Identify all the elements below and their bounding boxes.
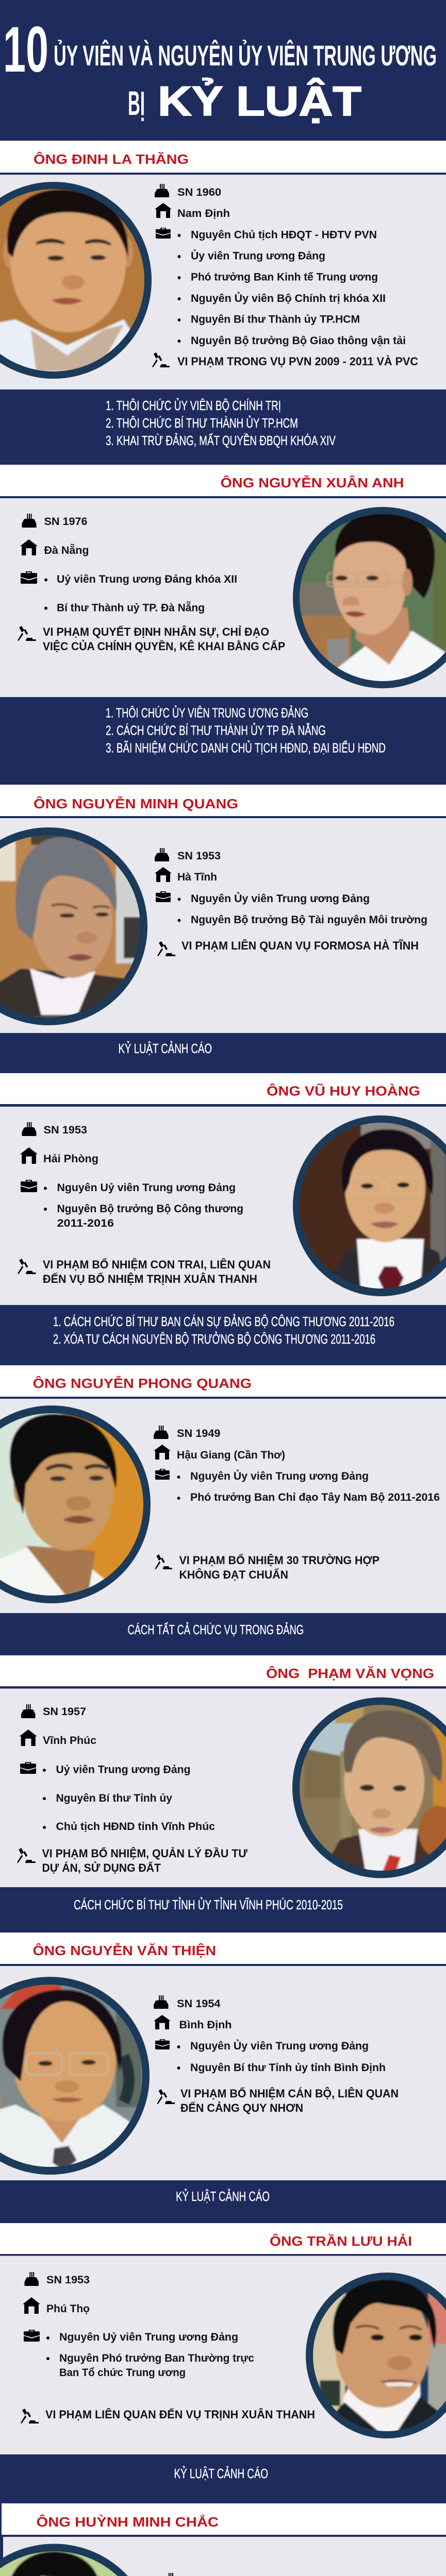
position list: Nguyên Bộ trưởng Bộ Tài nguyên Môi trường <box>191 914 427 926</box>
violation: VI PHẠM LIÊN QUAN VỤ FORMOSA HÀ TĨNH <box>181 939 419 952</box>
position list: Ban Tổ chức Trung ương <box>59 2367 186 2379</box>
hometown: Đà Nẵng <box>44 544 89 556</box>
position list: Nguyên Ủy viên Bộ Chính trị khóa XII <box>191 292 386 304</box>
position list: Uỷ viên Trung ương Đảng <box>56 1764 191 1775</box>
panel: Nguyễn Xuân Anh <box>0 465 446 785</box>
position list: Nguyên Uỷ viên Trung ương Đảng <box>59 2331 238 2343</box>
portrait <box>292 1697 446 1878</box>
position list: Nguyên Ủy viên Trung ương Đảng <box>190 1470 369 1482</box>
portrait <box>0 1977 150 2175</box>
icon: birthday cake <box>154 1995 168 2009</box>
position list: Phó trưởng Ban Chỉ đạo Tây Nam Bộ 2011-2016 <box>190 1492 440 1503</box>
violation <box>179 1554 379 1581</box>
title word BỊ: BỊ <box>128 84 145 122</box>
icon: gavel <box>18 626 36 641</box>
icon: gavel <box>155 1554 172 1569</box>
icon: gavel <box>18 1259 36 1274</box>
portrait <box>293 1115 446 1296</box>
discipline bar <box>0 1887 446 1933</box>
icon: birthday cake <box>21 1704 35 1718</box>
violation: DỰ ÁN, SỬ DỤNG ĐẤT <box>42 1861 161 1874</box>
discipline bar <box>0 1305 446 1365</box>
portrait <box>0 2544 128 2576</box>
icon: house <box>23 2297 40 2314</box>
icon: birthday cake <box>155 848 169 861</box>
position list: Bí thư Thành uỷ TP. Đà Nẵng <box>57 602 205 614</box>
panel: Huỳnh Minh Chắc <box>0 2503 446 2576</box>
icon: briefcase <box>21 1180 37 1192</box>
icon: birthday cake <box>22 1122 36 1136</box>
violation <box>42 1847 247 1874</box>
position list: Nguyên Chủ tịch HĐQT - HĐTV PVN <box>191 229 377 241</box>
icon: briefcase <box>24 2330 40 2342</box>
icon: house <box>154 2015 171 2029</box>
portrait <box>0 1405 151 1603</box>
position list: Phó trưởng Ban Kinh tế Trung ương <box>191 271 378 283</box>
icon: house <box>20 1730 37 1746</box>
panel: Phạm Văn Vọng <box>0 1655 446 1933</box>
portrait <box>0 827 147 1025</box>
position list <box>44 573 237 614</box>
position list: Nguyên Bộ trưởng Bộ Giao thông vận tải <box>191 335 406 347</box>
icon: birthday cake <box>25 2272 39 2286</box>
position list <box>177 2040 386 2074</box>
name heading: ÔNG ĐINH LA THĂNG <box>34 151 189 167</box>
discipline bar <box>0 697 446 785</box>
violation: KHÔNG ĐẠT CHUẨN <box>179 1568 288 1581</box>
position list <box>177 892 427 926</box>
birth year: SN 1953 <box>46 2274 90 2286</box>
panel: Nguyễn Minh Quang <box>0 785 446 1073</box>
header banner <box>0 0 446 141</box>
panel: Nguyễn Phong Quang <box>0 1365 446 1655</box>
panel: Đinh La Thăng <box>0 141 446 465</box>
position list: Uỷ viên Trung ương Đảng khóa XII <box>57 573 237 585</box>
birth year: SN 1976 <box>44 516 88 528</box>
icon: briefcase <box>20 1762 36 1774</box>
discipline bar <box>0 2180 446 2223</box>
name heading: ÔNG PHẠM VĂN VỌNG <box>266 1666 434 1681</box>
violation: VI PHẠM BỔ NHIỆM 30 TRƯỜNG HỢP <box>179 1554 379 1567</box>
position list: Nguyên Ủy viên Trung ương Đảng <box>190 2040 369 2052</box>
violation: ĐẾN CẢNG QUY NHƠN <box>180 2102 303 2114</box>
birth year: SN 1949 <box>177 1428 221 1439</box>
icon: briefcase <box>155 2039 170 2049</box>
icon: gavel <box>157 2089 175 2104</box>
discipline bar: 2. CÁCH CHỨC BÍ THƯ THÀNH ỦY TP ĐÀ NẴNG <box>106 722 326 738</box>
icon: briefcase <box>21 571 37 584</box>
title emphasis KỶ LUẬT: KỶ LUẬT <box>158 77 361 125</box>
discipline bar <box>0 1613 446 1655</box>
icon: house <box>155 867 172 882</box>
violation <box>43 625 285 653</box>
hometown: Hậu Giang (Cần Thơ) <box>177 1449 285 1461</box>
position list <box>43 1764 215 1833</box>
position list: Nguyên Uỷ viên Trung ương Đảng <box>57 1182 236 1194</box>
hometown: Hải Phòng <box>43 1153 98 1165</box>
position list: Chủ tịch HĐND tỉnh Vĩnh Phúc <box>56 1821 215 1833</box>
name heading: ÔNG NGUYỄN XUÂN ANH <box>221 475 404 490</box>
icon: briefcase <box>156 228 171 239</box>
violation: ĐẾN VỤ BỔ NHIỆM TRỊNH XUÂN THANH <box>43 1273 257 1285</box>
violation: VI PHẠM BỔ NHIỆM CON TRAI, LIÊN QUAN <box>43 1258 271 1271</box>
violation: VIỆC CỦA CHÍNH QUYỀN, KÊ KHAI BẰNG CẤP <box>43 640 285 653</box>
discipline bar: KỶ LUẬT CẢNH CÁO <box>119 1041 212 1056</box>
violation <box>43 1258 271 1285</box>
position list: Nguyên Ủy viên Trung ương Đảng <box>191 892 370 905</box>
position list: 2011-2016 <box>57 1217 114 1229</box>
icon: gavel <box>17 1848 35 1863</box>
hometown: Vĩnh Phúc <box>43 1735 96 1747</box>
position list <box>46 2331 254 2379</box>
discipline bar <box>0 1033 446 1073</box>
position list: Nguyên Bí thư Tỉnh ủy <box>56 1792 172 1804</box>
discipline bar <box>0 389 446 465</box>
hometown: Phú Thọ <box>46 2303 90 2315</box>
name heading: ÔNG HUỲNH MINH CHẮC <box>36 2514 219 2530</box>
violation: VI PHẠM BỔ NHIỆM CÁN BỘ, LIÊN QUAN <box>180 2087 399 2100</box>
icon: birthday cake <box>154 1426 168 1439</box>
icon: gavel <box>157 941 175 956</box>
name heading: ÔNG NGUYỄN VĂN THIỆN <box>33 1943 216 1958</box>
discipline bar: CÁCH TẤT CẢ CHỨC VỤ TRONG ĐẢNG <box>128 1622 304 1637</box>
birth year: SN 1954 <box>177 1998 221 2010</box>
icon: birthday cake <box>155 184 169 197</box>
birth year: SN 1953 <box>43 1124 87 1136</box>
icon: gavel <box>152 352 170 367</box>
panel: Trần Lưu Hải <box>0 2223 446 2503</box>
discipline bar: 1. THÔI CHỨC ỦY VIÊN TRUNG ƯƠNG ĐẢNG <box>106 705 308 720</box>
position list: Nguyên Phó trưởng Ban Thường trực <box>59 2352 254 2364</box>
hometown: Bình Định <box>179 2019 232 2031</box>
violation <box>180 2087 399 2114</box>
icon: birthday cake <box>163 2573 178 2576</box>
icon: house <box>20 539 38 555</box>
icon: briefcase <box>156 891 171 902</box>
position list <box>177 229 406 347</box>
icon: house <box>154 1445 171 1460</box>
discipline bar: KỶ LUẬT CẢNH CÁO <box>176 2189 270 2204</box>
position list <box>177 1470 440 1503</box>
portrait <box>0 182 152 379</box>
position list: Nguyên Bí thư Thành ủy TP.HCM <box>191 313 360 326</box>
name heading: ÔNG NGUYỄN MINH QUANG <box>34 796 238 811</box>
icon: house <box>155 203 172 218</box>
position list: Nguyên Bộ trưởng Bộ Công thương <box>57 1203 243 1215</box>
icon: gavel <box>21 2409 39 2424</box>
discipline bar: 1. THÔI CHỨC ỦY VIÊN BỘ CHÍNH TRỊ <box>106 398 281 413</box>
violation: VI PHẠM BỔ NHIỆM, QUẢN LÝ ĐẦU TƯ <box>42 1847 247 1860</box>
name heading: ÔNG VŨ HUY HOÀNG <box>267 1083 420 1098</box>
hometown: Hà Tĩnh <box>177 871 217 883</box>
panel: Nguyễn Văn Thiện <box>0 1933 446 2223</box>
position list: Nguyên Bí thư Tỉnh ủy tỉnh Bình Định <box>190 2062 386 2074</box>
name heading: ÔNG TRẦN LƯU HẢI <box>270 2233 412 2249</box>
panel: Vũ Huy Hoàng <box>0 1073 446 1365</box>
icon: briefcase <box>155 1469 170 1480</box>
hometown: Nam Định <box>177 208 230 219</box>
discipline bar: 3. KHAI TRỪ ĐẢNG, MẤT QUYỀN ĐBQH KHÓA XIV <box>106 433 336 448</box>
violation: VI PHẠM LIÊN QUAN ĐẾN VỤ TRỊNH XUÂN THANH <box>45 2408 315 2421</box>
discipline bar: 2. THÔI CHỨC BÍ THƯ THÀNH ỦY TP.HCM <box>106 415 298 431</box>
discipline bar: KỶ LUẬT CẢNH CÁO <box>174 2466 268 2481</box>
title number 10: 10 <box>3 14 48 86</box>
birth year: SN 1957 <box>43 1706 86 1718</box>
discipline bar: CÁCH CHỨC BÍ THƯ TỈNH ỦY TỈNH VĨNH PHÚC 2010-2015 <box>74 1897 343 1912</box>
name heading: ÔNG NGUYỄN PHONG QUANG <box>33 1376 252 1391</box>
violation: VI PHẠM TRONG VỤ PVN 2009 - 2011 VÀ PVC <box>177 355 418 368</box>
violation: VI PHẠM QUYẾT ĐỊNH NHÂN SỰ, CHỈ ĐẠO <box>43 625 269 638</box>
position list: Ủy viên Trung ương Đảng <box>191 249 325 262</box>
discipline bar <box>0 2454 446 2503</box>
icon: house <box>20 1147 38 1164</box>
birth year: SN 1953 <box>177 850 221 862</box>
portrait <box>306 2273 446 2438</box>
position list <box>44 1182 243 1229</box>
birth year: SN 1960 <box>177 187 221 198</box>
portrait <box>293 507 446 688</box>
icon: birthday cake <box>22 514 36 528</box>
